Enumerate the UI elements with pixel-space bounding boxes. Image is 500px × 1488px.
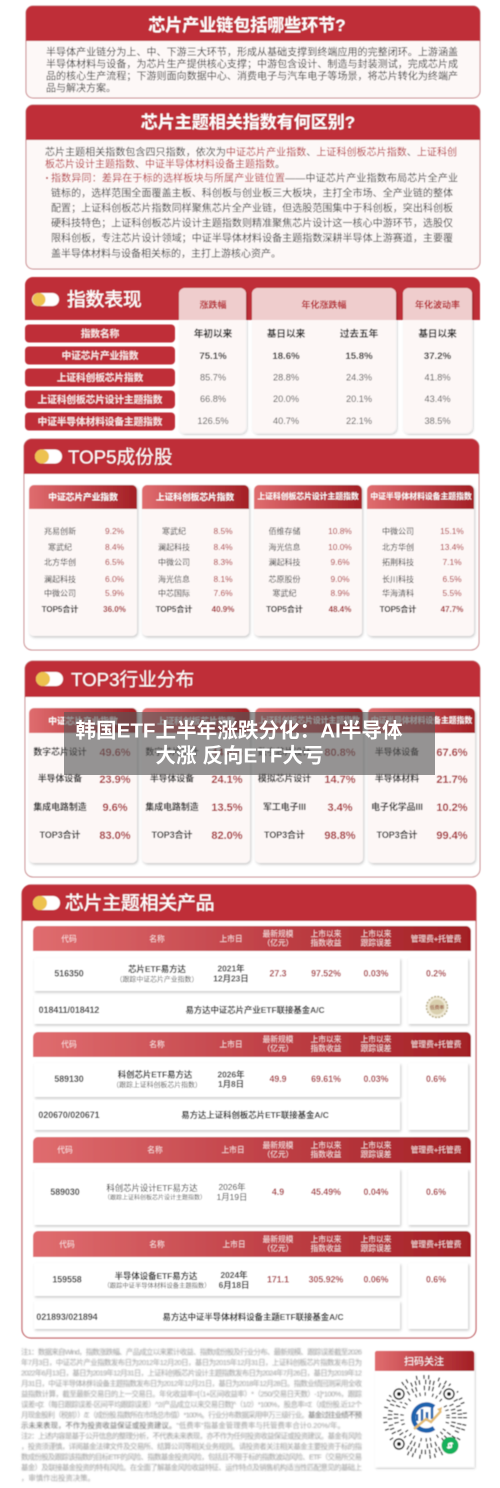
product table: 589030: 2026年 xyxy=(218,1182,246,1192)
product table: 589030: 管理费+托管费 xyxy=(411,1144,462,1154)
card: 上证科创板芯片设计主题指数: 海光信息 xyxy=(268,542,300,552)
product table: 589030: 上市以来 xyxy=(361,1140,392,1150)
card: 上证科创板芯片指数: 44.4% xyxy=(211,747,243,759)
product table: 159558: 6月18日 xyxy=(219,1280,249,1290)
text block: 产业链说明 xyxy=(46,46,458,95)
heading: TOP3行业分布: TOP3行业分布 xyxy=(71,669,194,690)
card: 上证科创板芯片设计主题指数: TOP5合计 xyxy=(266,604,303,614)
card: 中证芯片产业指数: 6.0% xyxy=(105,574,125,584)
card: 上证科创板芯片设计主题指数: 10.8% xyxy=(328,526,352,536)
footnotes: 注2：上述内容是基于公开信息的整理分析，不代表未来表现，亦不作为任何投资收益保证或投资建议。基金有风险 xyxy=(21,1431,363,1440)
card: 上证科创板芯片设计主题指数: 佰维存储 xyxy=(268,526,300,536)
text block: 指数异同: 指数异同：差异在于标的选样板块与所属产业链位置——中证芯片产业指数布局芯片全产业 xyxy=(51,172,458,185)
footnotes: 年7月3日，中证芯片产业指数发布日为2012年12月20日，基日为2015年12月31日，上证科创板芯片指数发布日为 xyxy=(21,1358,362,1367)
panel: 扫码关注 xyxy=(375,1351,474,1467)
panel: 芯片主题相关指数有何区别 xyxy=(26,105,480,269)
card: 中证芯片产业指数: 寒武纪 xyxy=(48,542,72,552)
card: 中证半导体材料设备主题指数: 半导体材料 xyxy=(375,772,419,784)
heading: 芯片主题相关产品: 芯片主题相关产品 xyxy=(65,892,214,914)
overlay: news headline banner xyxy=(64,712,435,775)
product table: 159558: 2024年 xyxy=(220,1270,248,1280)
card: 上证科创板芯片指数: 13.5% xyxy=(211,802,243,814)
card: 上证科创板芯片设计主题指数: 寒武纪 xyxy=(272,588,296,598)
product table: 159558: 跟踪误差 xyxy=(361,1243,392,1253)
card: 中证芯片产业指数: 兆易创新 xyxy=(44,526,76,536)
card: 中证芯片产业指数: 集成电路制造 xyxy=(33,801,87,812)
card: 上证科创板芯片指数: 8.5% xyxy=(213,526,233,536)
card: 上证科创板芯片指数: 82.0% xyxy=(211,830,243,842)
column headers xyxy=(199,299,460,310)
product table: 159558: 0.6% xyxy=(426,1274,446,1284)
product table: 159558: 171.1 xyxy=(267,1274,289,1284)
card: 中证半导体材料设备主题指数: 21.7% xyxy=(436,774,468,786)
card: 上证科创板芯片指数: 8.1% xyxy=(213,574,233,584)
text block: 指数异同 xyxy=(46,172,458,260)
footnotes: 月31日，中证半导体材料设备主题指数发布日为2012年12月21日，基日为2018年12月28日。指数业绩回测采用全收 xyxy=(21,1379,363,1388)
product table: 589030: 最新规模 xyxy=(263,1140,294,1150)
product table: 589130: 最新规模 xyxy=(263,1034,294,1044)
card: 中证芯片产业指数: 半导体设备 xyxy=(38,772,82,784)
product table: 589130: 2026年 xyxy=(217,1070,245,1080)
product table: 589130: 上市以来 xyxy=(361,1034,392,1044)
product table: 159558: 305.92% xyxy=(309,1274,344,1284)
footnotes: 注1：数据来自Wind，指数涨跌幅、产品成立以来累计收益、指数成份股及行业分布、最新规模、跟踪误差截至2026 xyxy=(21,1347,362,1356)
card: 上证科创板芯片设计主题指数: 98.8% xyxy=(324,830,356,842)
product table: 589030: 跟踪误差 xyxy=(361,1149,392,1159)
product table: 159558: 159558 xyxy=(52,1274,82,1284)
product table: 589030: 589030 xyxy=(50,1187,80,1197)
product table: 516350: 芯片ETF易方达 xyxy=(128,964,186,974)
card: 上证科创板芯片指数: 澜起科技 xyxy=(158,542,190,552)
product table: 589130: 69.61% xyxy=(311,1074,341,1084)
card: 上证科创板芯片指数: 中微公司 xyxy=(158,557,190,567)
row labels: 指数名称 xyxy=(81,328,120,340)
product table: 516350: 上市日 xyxy=(219,934,243,944)
product table: 516350: 12月23日 xyxy=(213,974,249,984)
footnotes: 月现金股利（税前））/Σ（成份股.指数所在市场总市值）*100%。行业分布数据采用申万三级行业。基金过往业绩不预 xyxy=(21,1410,363,1419)
card: 中证半导体材料设备主题指数: 47.7% xyxy=(441,605,463,614)
card: 上证科创板芯片设计主题指数: 模拟芯片设计 xyxy=(258,772,311,784)
product table: 589030: 1月19日 xyxy=(217,1192,247,1202)
card: 上证科创板芯片指数 xyxy=(142,708,250,863)
text block: 产业链说明: 品与解决方案。 xyxy=(46,82,116,95)
card: 上证科创板芯片指数: 数字芯片设计 xyxy=(145,746,199,757)
product table: 589030: 4.9 xyxy=(272,1187,284,1197)
data table: 40.7% xyxy=(273,416,299,426)
row labels: 中证芯片产业指数 xyxy=(62,350,139,362)
text block: 产业链说明: 半导体材料与设备，为芯片生产提供核心支撑；中游包含设计、制造与封装测试，完成芯片成 xyxy=(46,58,458,71)
product table: 516350: 跟踪误差 xyxy=(361,938,392,948)
data table: 20.0% xyxy=(273,394,299,404)
card: 中证半导体材料设备主题指数: 拓荆科技 xyxy=(382,557,414,567)
product table: 159558 xyxy=(33,1231,471,1329)
card: 上证科创板芯片设计主题指数: 14.7% xyxy=(324,774,356,786)
row labels: 中证半导体材料设备主题指数 xyxy=(38,416,163,428)
data table: 15.8% xyxy=(345,351,373,362)
data table: 126.5% xyxy=(197,416,229,426)
text block: 指数异同: 配置；上证科创板芯片指数同样聚焦芯片全产业链，但选股范围集中于科创板，突出科创板 xyxy=(51,202,453,215)
product table: 589030: 名称 xyxy=(147,1144,163,1154)
product table: 159558: 上市以来 xyxy=(361,1234,392,1244)
product table: 159558: 上市日 xyxy=(222,1239,246,1249)
card: 上证科创板芯片指数: 中芯国际 xyxy=(158,588,190,598)
product table: 589130: 管理费+托管费 xyxy=(411,1039,462,1049)
panel: 指数表现 xyxy=(25,277,480,433)
icon: toggle xyxy=(32,293,59,306)
card: 上证科创板芯片指数: 7.6% xyxy=(213,588,233,598)
card: 上证科创板芯片设计主题指数: 芯原股份 xyxy=(268,574,300,584)
card: 中证半导体材料设备主题指数: TOP3合计 xyxy=(377,829,418,840)
product table: 159558: 最新规模 xyxy=(263,1234,294,1244)
product table: 159558: 021893/021894 xyxy=(36,1312,98,1322)
card: 中证芯片产业指数: 8.4% xyxy=(105,542,125,552)
row labels xyxy=(25,324,175,430)
data table: 37.2% xyxy=(424,351,452,362)
product table: 589130: 上市日 xyxy=(219,1039,243,1049)
data table: 66.8% xyxy=(200,394,226,404)
card: 中证半导体材料设备主题指数 xyxy=(367,485,474,636)
card: 中证半导体材料设备主题指数: 长川科技 xyxy=(382,574,414,584)
card: 上证科创板芯片设计主题指数: TOP3合计 xyxy=(264,829,305,840)
column headers: 涨跌幅 xyxy=(199,299,227,310)
product table: 516350: 018411/018412 xyxy=(39,1005,99,1015)
text block: 指数异同: 盖半导体材料与设备相关标的，主打上游核心资产。 xyxy=(51,247,281,260)
card: 上证科创板芯片设计主题指数: 80.8% xyxy=(324,747,356,759)
card: 上证科创板芯片设计主题指数: 数字芯片设计 xyxy=(258,746,311,757)
card: 中证半导体材料设备主题指数: 67.6% xyxy=(436,747,468,759)
product table: 589130: 代码 xyxy=(61,1039,77,1049)
card: 上证科创板芯片设计主题指数: 9.6% xyxy=(330,557,350,567)
card: 中证半导体材料设备主题指数: 15.1% xyxy=(440,526,464,536)
product table: 589130: 020670/020671 xyxy=(38,1110,100,1120)
data table: 过去五年 xyxy=(340,328,379,340)
product table: 589130: （跟踪上证科创板芯片指数） xyxy=(112,1080,202,1089)
product table: 589030: （跟踪上证科创板芯片设计主题指数） xyxy=(104,1194,206,1202)
panel: 扫码关注: 扫码关注 xyxy=(404,1355,444,1368)
card: 上证科创板芯片指数: 半导体设备 xyxy=(150,772,194,784)
product table: 589130: 科创芯片ETF易方达 xyxy=(118,1070,193,1080)
card: 中证芯片产业指数: TOP5合计 xyxy=(42,604,78,614)
card: 上证科创板芯片指数: 40.9% xyxy=(212,605,234,614)
card: 上证科创板芯片指数: 上证科创板芯片指数 xyxy=(156,491,234,502)
card: 中证半导体材料设备主题指数: 华海清科 xyxy=(382,588,414,598)
card: 中证芯片产业指数: 9.6% xyxy=(102,802,128,814)
card: 中证半导体材料设备主题指数: 中微公司 xyxy=(382,526,414,536)
text block: 指数介绍: 板芯片设计主题指数、中证半导体材料设备主题指数。 xyxy=(45,158,285,171)
product table: 589030: 科创芯片设计ETF易方达 xyxy=(106,1183,198,1193)
card: 中证半导体材料设备主题指数: 5.5% xyxy=(442,588,462,598)
card: 中证半导体材料设备主题指数: TOP5合计 xyxy=(380,604,416,614)
product table: 516350: 27.3 xyxy=(269,968,287,978)
card: 中证芯片产业指数: 9.2% xyxy=(105,526,125,536)
product table: 516350 xyxy=(33,926,471,1024)
card: 中证芯片产业指数: 中微公司 xyxy=(44,588,76,598)
column headers: 年化涨跌幅 xyxy=(301,299,347,310)
data table: 28.8% xyxy=(273,372,299,382)
product table: 159558: 半导体设备ETF易方达 xyxy=(115,1271,198,1281)
card: 中证半导体材料设备主题指数: 中证半导体材料设备主题指数 xyxy=(371,715,472,725)
heading: 指数表现: 指数表现 xyxy=(67,289,142,310)
card: 中证半导体材料设备主题指数: 7.1% xyxy=(442,557,462,567)
data table: 年初以来 xyxy=(194,328,233,340)
panel: TOP5成份股 xyxy=(24,439,479,650)
text block: 产业链说明: 品的核心生产流程；下游则面向数据中心、消费电子与汽车电子等场景，将芯片转化为终端产 xyxy=(46,70,458,83)
icon: 小程序码 xyxy=(385,1377,465,1457)
card: 中证半导体材料设备主题指数: 10.2% xyxy=(436,802,468,814)
card: 中证芯片产业指数: 北方华创 xyxy=(44,557,76,567)
product table: 516350: 2021年 xyxy=(217,964,245,974)
footnotes: 数成份股及跟踪该指数的目标ETF的风险、指数基金投资风险，包括且不限于标的指数波动风险、ETF（交易所交易 xyxy=(21,1452,362,1461)
footnotes xyxy=(21,1347,363,1482)
product table: 589130: 易方达上证科创板芯片ETF联接基金A/C xyxy=(181,1110,329,1120)
card: 中证半导体材料设备主题指数: 6.5% xyxy=(442,574,462,584)
card: 中证半导体材料设备主题指数: 99.4% xyxy=(436,830,468,842)
product table: 159558: （亿元） xyxy=(263,1243,293,1253)
data table: 24.3% xyxy=(346,372,372,382)
column cards xyxy=(179,288,472,433)
footnotes: 益指数计算，截至最新交易日的上一交易日。年化收益率=[（1+区间收益率）*（250/交易日天数）-1]*100%，跟踪 xyxy=(21,1389,363,1398)
product table: 589030: 上市日 xyxy=(221,1144,245,1154)
product table: 589130: 跟踪误差 xyxy=(361,1043,392,1053)
data table: 18.6% xyxy=(272,351,300,362)
text block: 指数介绍 xyxy=(45,146,457,171)
icon: 低费率 badge: 低费率 xyxy=(430,1004,444,1011)
card: 中证芯片产业指数 xyxy=(29,485,137,636)
product table: 589130: 名称 xyxy=(149,1039,165,1049)
icon: 低费率 badge xyxy=(426,996,448,1018)
product table: 516350: 97.52% xyxy=(311,968,341,978)
product table: 516350: 0.2% xyxy=(426,968,446,978)
product table: 159558: （跟踪中证半导体材料设备主题指数） xyxy=(103,1280,211,1290)
data table: 基日以来 xyxy=(267,328,306,340)
data table: 43.4% xyxy=(424,394,451,404)
product table: 589130: 0.03% xyxy=(364,1074,389,1084)
card: 中证芯片产业指数: 49.6% xyxy=(99,747,131,759)
card: 中证芯片产业指数: 6.5% xyxy=(105,557,125,567)
card: 上证科创板芯片指数: TOP3合计 xyxy=(152,829,193,840)
product table: 589030: 45.49% xyxy=(311,1187,341,1197)
text block: 指数异同: 硬科技特色；上证科创板芯片设计主题指数则精准聚焦芯片设计这一核心中游环节，选股仅 xyxy=(51,217,453,230)
product table: 159558: 0.06% xyxy=(364,1274,389,1284)
product table: 589030: 0.04% xyxy=(364,1187,389,1197)
card: 中证芯片产业指数: TOP3合计 xyxy=(40,829,81,840)
card: 中证芯片产业指数: 中证芯片产业指数 xyxy=(48,491,118,502)
data table: 38.5% xyxy=(424,416,451,426)
product table: 589130: 589130 xyxy=(54,1074,84,1084)
product table: 516350: 0.03% xyxy=(364,968,389,978)
product table: 516350: 管理费+托管费 xyxy=(411,934,462,944)
footnotes: 基金）及联接基金投资的特有风险。在全面了解基金风险收益特征、运作特点及销售机构适当性匹配意见的基础上 xyxy=(21,1463,363,1472)
product table: 589030: 上市以来 xyxy=(311,1140,342,1150)
card: 中证半导体材料设备主题指数: 电子化学品III xyxy=(371,801,423,812)
product table: 589130 xyxy=(33,1032,471,1130)
card: 上证科创板芯片指数: 24.1% xyxy=(211,774,243,786)
product table: 159558: 上市以来 xyxy=(311,1234,342,1244)
icon: toggle xyxy=(36,672,63,686)
product table: 516350: 上市以来 xyxy=(361,928,392,938)
card: 上证科创板芯片设计主题指数: 3.4% xyxy=(327,802,353,814)
product table: 589030: 0.6% xyxy=(426,1187,446,1197)
data table: 85.7% xyxy=(200,372,226,382)
product table: 159558: 指数收益 xyxy=(311,1243,342,1253)
product table: 516350: （跟踪中证芯片产业指数） xyxy=(116,974,198,984)
card: 中证芯片产业指数: 5.9% xyxy=(105,588,125,598)
card: 上证科创板芯片设计主题指数: 8.9% xyxy=(330,588,350,598)
text block: 指数异同: 链标的，选样范围全面覆盖主板、科创板与创业板三大板块，主打全市场、全产业链的整体 xyxy=(51,187,453,200)
icon: toggle xyxy=(35,450,62,464)
card: 上证科创板芯片设计主题指数: 上证科创板芯片设计主题指数 xyxy=(257,491,359,501)
product table: 516350: （亿元） xyxy=(263,938,293,948)
overlay: news headline banner: 韩国ETF上半年涨跌分化：AI半导体 xyxy=(75,720,403,742)
text block: 产业链说明: 半导体产业链分为上、中、下游三大环节，形成从基础支撑到终端应用的完整闭环。上游涵盖 xyxy=(46,46,458,59)
card: 上证科创板芯片设计主题指数: 军工电子III xyxy=(263,801,306,812)
card: 上证科创板芯片指数: 8.4% xyxy=(213,542,233,552)
card: 上证科创板芯片指数: 寒武纪 xyxy=(162,526,186,536)
overlay: news headline banner: 大涨 反向ETF大亏 xyxy=(155,744,324,768)
card: 上证科创板芯片设计主题指数: 上证科创板芯片设计主题指数 xyxy=(258,715,360,725)
card: 中证半导体材料设备主题指数: 13.4% xyxy=(440,542,464,552)
footnotes: 2022年6月13日，基日为2019年12月31日，上证科创板芯片设计主题指数发布日为2024年7月26日，基日为2019年12 xyxy=(21,1368,362,1377)
card: 上证科创板芯片设计主题指数 xyxy=(254,485,362,636)
data table: 基日以来 xyxy=(418,328,457,340)
product table: 589130: 49.9 xyxy=(269,1074,287,1084)
card: 中证半导体材料设备主题指数: 中证半导体材料设备主题指数 xyxy=(370,491,472,501)
panel: TOP3行业分布 xyxy=(25,661,480,877)
column headers: 年化波动率 xyxy=(415,299,460,310)
product table: 589130: 1月8日 xyxy=(218,1079,244,1089)
card: 上证科创板芯片设计主题指数 xyxy=(255,708,363,863)
card: 中证芯片产业指数: 83.0% xyxy=(99,830,131,842)
product table: 589130: 0.6% xyxy=(426,1074,446,1084)
footnotes: 误差=[Σ（每日跟踪误差-区间平均跟踪误差）^2/产品成立以来交易日数]^（1/2）*100%，股息率=Σ（成份股.近12个 xyxy=(21,1400,363,1409)
text block: 指数异同: 限科创板，专注芯片设计领域；中证半导体材料设备主题指数深耕半导体上游赛道，主要覆 xyxy=(51,232,453,245)
product table: 589030: （亿元） xyxy=(263,1149,293,1159)
footnotes: ，审慎作出投资决策。 xyxy=(21,1473,95,1482)
product table: 159558: 易方达中证半导体材料设备主题ETF联接基金A/C xyxy=(162,1312,344,1322)
product table: 589130: 上市以来 xyxy=(311,1034,342,1044)
card: 中证芯片产业指数: 中证芯片产业指数 xyxy=(48,715,118,726)
card: 中证半导体材料设备主题指数: 半导体设备 xyxy=(375,746,419,757)
heading: 产业链: 芯片产业链包括哪些环节? xyxy=(148,15,346,35)
product table: 159558: 管理费+托管费 xyxy=(411,1239,462,1249)
product table: 589030 xyxy=(33,1137,471,1225)
card: 中证芯片产业指数: 36.0% xyxy=(103,605,126,614)
data table: 41.8% xyxy=(424,372,451,382)
heading: 指数区别: 芯片主题相关指数有何区别? xyxy=(141,113,355,132)
heading: TOP5成份股: TOP5成份股 xyxy=(68,446,173,468)
data table: 75.1% xyxy=(199,351,227,362)
row labels: 上证科创板芯片指数 xyxy=(57,372,144,384)
card: 上证科创板芯片指数: 上证科创板芯片指数 xyxy=(157,715,235,726)
card: 上证科创板芯片设计主题指数: 9.0% xyxy=(330,574,350,584)
footnotes: ，投资须谨慎，详阅基金法律文件及交易所、结算公司等相关业务规则。请投资者关注相关基金主要投资于标的指 xyxy=(21,1442,363,1451)
footnotes: 示未来表现，不作为投资收益保证或投资建议。"低费率"指基金管理费率与托管费率合计0.20%/年。 xyxy=(21,1421,345,1430)
card: 中证芯片产业指数: 23.9% xyxy=(99,774,131,786)
text block: 指数介绍: 芯片主题相关指数包含四只指数，依次为中证芯片产业指数、上证科创板芯片指数、上证科创 xyxy=(45,146,457,159)
product table: 516350: 516350 xyxy=(54,968,84,978)
product table: 159558: 名称 xyxy=(149,1239,165,1249)
data table: 20.1% xyxy=(346,394,372,404)
data table: 22.1% xyxy=(346,416,372,426)
card: 上证科创板芯片指数: TOP5合计 xyxy=(156,604,192,614)
panel: 芯片产业链包括哪些环节 xyxy=(26,6,480,98)
product table: 589030: 指数收益 xyxy=(311,1149,342,1159)
icon: toggle xyxy=(33,896,60,910)
product table: 516350: 上市以来 xyxy=(311,928,342,938)
card: 上证科创板芯片指数: 集成电路制造 xyxy=(145,801,199,812)
data table xyxy=(194,328,457,426)
card: 上证科创板芯片设计主题指数: 澜起科技 xyxy=(268,557,300,567)
card: 中证芯片产业指数: 澜起科技 xyxy=(44,574,76,584)
product table: 159558: 代码 xyxy=(59,1239,75,1249)
panel: 芯片主题相关产品 xyxy=(22,885,476,1338)
card: 上证科创板芯片指数: 8.3% xyxy=(213,557,233,567)
card: 中证半导体材料设备主题指数 xyxy=(368,708,475,863)
card: 上证科创板芯片指数: 海光信息 xyxy=(158,574,190,584)
product table: 516350: 指数收益 xyxy=(311,938,342,948)
card: 中证芯片产业指数 xyxy=(29,708,137,863)
product table: 516350: 代码 xyxy=(61,934,77,944)
product table: 516350: 易方达中证芯片产业ETF联接基金A/C xyxy=(185,1005,325,1015)
card: 上证科创板芯片设计主题指数: 48.4% xyxy=(329,605,351,614)
card: 中证半导体材料设备主题指数: 北方华创 xyxy=(382,542,414,552)
product table: 589030: 代码 xyxy=(57,1144,73,1154)
product table: 516350: 最新规模 xyxy=(263,928,294,938)
row labels: 上证科创板芯片设计主题指数 xyxy=(38,394,163,406)
product table: 516350: 名称 xyxy=(149,934,165,944)
product table: 589130: 指数收益 xyxy=(311,1043,342,1053)
product table: 589130: （亿元） xyxy=(263,1043,293,1053)
card: 上证科创板芯片指数 xyxy=(142,485,249,636)
card: 上证科创板芯片设计主题指数: 10.0% xyxy=(328,542,352,552)
card: 中证芯片产业指数: 数字芯片设计 xyxy=(33,746,87,757)
